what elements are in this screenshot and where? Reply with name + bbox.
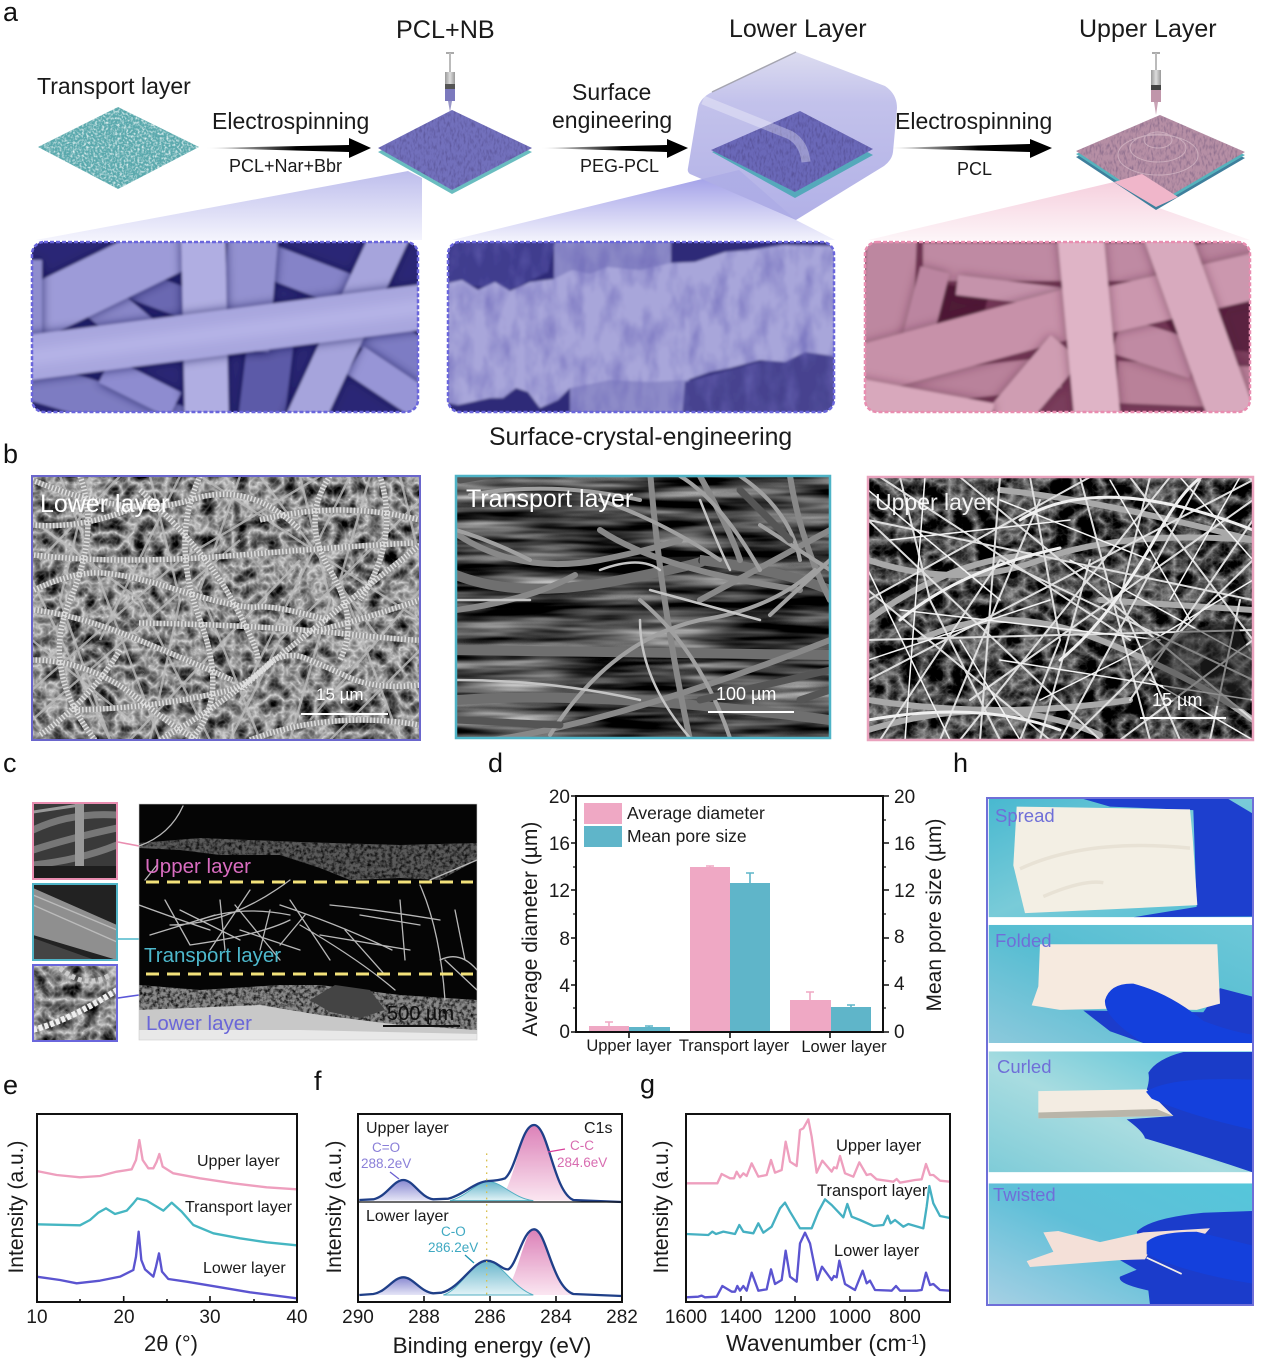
- axes frame: [358, 1114, 622, 1302]
- legend: [584, 803, 765, 847]
- annotation: C-C peak: [548, 1138, 607, 1170]
- x axis numbers: [665, 1307, 921, 1328]
- axes frame and ticks: [571, 796, 889, 1038]
- right axis numbers: [894, 787, 915, 1043]
- x axis numbers: 1200: [774, 1307, 816, 1328]
- scale bar: 15 µm: [1140, 690, 1226, 719]
- label c: c: [3, 748, 16, 778]
- y axis title: Intensity (a.u.): [5, 1140, 28, 1274]
- heading: lower layer: Lower Layer: [729, 15, 867, 43]
- label: twisted: Twisted: [993, 1184, 1056, 1205]
- x axis title: ): [919, 1330, 927, 1356]
- x axis numbers: 288: [408, 1307, 440, 1328]
- annotation: lower layer: Lower layer: [366, 1208, 449, 1225]
- axes frame: [686, 1114, 950, 1302]
- x axis title: Wavenumber (cm: [726, 1330, 907, 1356]
- category labels: Transport layer: [679, 1037, 790, 1055]
- inset: upper layer: [33, 803, 117, 879]
- annotation: upper layer and C1s: [366, 1120, 612, 1137]
- cross-section SEM image: [139, 804, 477, 1040]
- panel c: cross-section: [3, 748, 477, 1041]
- y axis title: Intensity (a.u.): [323, 1140, 346, 1274]
- annotation: C-O peak: 286.2eV: [428, 1240, 478, 1255]
- panel h: flexibility photos: [953, 748, 1253, 1305]
- panel d: bar chart: [488, 748, 946, 1056]
- arrow 2: [540, 139, 688, 158]
- axes frame: [37, 1114, 297, 1302]
- panel: lower fibre render: [30, 240, 420, 414]
- FTIR curves: [686, 1119, 950, 1297]
- right axis numbers: 8: [894, 927, 905, 948]
- scale bar: 15 µm: 15 µm: [1152, 690, 1202, 710]
- zoom beam to upper layer panel: [868, 182, 1250, 240]
- x axis numbers: 286: [474, 1307, 506, 1328]
- label d: d: [488, 748, 503, 778]
- label b: b: [3, 439, 18, 469]
- right axis title: Mean pore size (µm): [923, 818, 946, 1012]
- zoom beam to lower-left panel: [36, 171, 422, 240]
- label e: e: [3, 1070, 18, 1100]
- series labels: [817, 1137, 928, 1260]
- icon: upper layer sheet: [1076, 115, 1245, 210]
- zoom beam to surface engineering panel: [452, 170, 835, 240]
- left axis numbers: 16: [549, 834, 570, 855]
- left axis numbers: 8: [559, 929, 570, 950]
- legend: Mean pore size: [627, 826, 747, 846]
- x axis numbers: 800: [889, 1307, 921, 1328]
- panel b: SEM images: [3, 439, 1253, 745]
- icon: lower layer sheet inside crystal: [688, 52, 897, 220]
- x axis numbers: 284: [540, 1307, 572, 1328]
- inset: transport layer: [33, 884, 117, 960]
- right axis numbers: 12: [894, 881, 915, 902]
- bars: [589, 866, 871, 1032]
- left axis numbers: 12: [549, 881, 570, 902]
- annotation: C-O peak: [428, 1224, 478, 1263]
- photo: folded: [989, 925, 1253, 1043]
- heading: upper layer: Upper Layer: [1079, 15, 1217, 43]
- series labels: Transport layer: [817, 1182, 928, 1200]
- SEM: transport layer: [456, 470, 830, 745]
- x axis numbers: 40: [286, 1307, 308, 1328]
- x axis numbers: 282: [606, 1307, 638, 1328]
- label: folded: Folded: [995, 930, 1052, 951]
- series labels: [185, 1153, 293, 1277]
- dashed layer boundaries: [146, 882, 473, 974]
- scale bar: 100 µm: 100 µm: [716, 684, 776, 704]
- left axis numbers: 0: [559, 1022, 570, 1043]
- label: PEG-PCL: PEG-PCL: [580, 156, 659, 176]
- scale bar: 500 µm: 500 µm: [387, 1003, 454, 1025]
- annotation: upper layer and C1s: Upper layer: [366, 1120, 449, 1137]
- right axis numbers: 4: [894, 974, 905, 995]
- left axis numbers: 20: [549, 787, 570, 808]
- connector lines: [118, 842, 139, 998]
- series labels: Upper layer: [197, 1153, 280, 1170]
- label h: h: [953, 748, 968, 778]
- label: upper layer: Upper layer: [875, 489, 994, 515]
- legend: Average diameter: [627, 803, 765, 823]
- right axis numbers: 16: [894, 834, 915, 855]
- XRD curves: [37, 1140, 297, 1298]
- left axis numbers: [549, 787, 570, 1043]
- x axis numbers: 1600: [665, 1307, 707, 1328]
- label: lower layer: Lower layer: [146, 1012, 252, 1035]
- annotation: C-C peak: 284.6eV: [557, 1155, 607, 1170]
- panel e: XRD chart: [3, 1070, 308, 1356]
- heading: transport layer: Transport layer: [37, 73, 191, 99]
- panel f: XPS chart: [314, 1066, 638, 1358]
- scale bar: 15 µm: 15 µm: [316, 685, 364, 704]
- series labels: Lower layer: [834, 1242, 920, 1260]
- label: PCL+Nar+Bbr: PCL+Nar+Bbr: [229, 156, 342, 176]
- label: electrospinning 2: Electrospinning: [895, 108, 1052, 134]
- arrow 1: [205, 138, 371, 158]
- icon: PCL+NB sheet: [378, 110, 532, 194]
- label: surface engineering: engineering: [552, 107, 672, 133]
- panel: crystal-engineered fibre render: [444, 238, 840, 418]
- x axis numbers: 1400: [720, 1307, 762, 1328]
- x axis numbers: 1000: [829, 1307, 871, 1328]
- x axis numbers: 30: [199, 1307, 221, 1328]
- label: lower layer: Lower layer: [40, 490, 169, 518]
- category labels: Lower layer: [801, 1038, 887, 1056]
- x axis numbers: 10: [26, 1307, 48, 1328]
- x axis title: Binding energy (eV): [393, 1333, 591, 1358]
- frame: [987, 798, 1253, 1305]
- left axis numbers: 4: [559, 976, 570, 997]
- icon: syringe 2: [1151, 52, 1161, 115]
- XPS spectra: [359, 1125, 622, 1298]
- annotation: C=O peak: [361, 1140, 411, 1179]
- right axis numbers: 20: [894, 787, 915, 808]
- label: electrospinning 1: Electrospinning: [212, 108, 369, 134]
- x axis numbers: [26, 1307, 308, 1328]
- annotation: C-O peak: C-O: [441, 1224, 466, 1239]
- y axis title: Intensity (a.u.): [650, 1140, 673, 1274]
- series labels: Transport layer: [185, 1199, 293, 1216]
- panel g: FTIR chart: [640, 1069, 950, 1356]
- annotation: upper layer and C1s: C1s: [584, 1120, 612, 1137]
- series labels: Upper layer: [836, 1137, 922, 1155]
- photo strip: [989, 798, 1253, 1305]
- label: PCL: PCL: [957, 159, 992, 179]
- SEM: lower layer: [32, 476, 420, 740]
- arrow 3: [888, 139, 1052, 158]
- photo: curled: [989, 1051, 1253, 1172]
- x axis numbers: [342, 1307, 638, 1328]
- left axis title: Average diameter (µm): [519, 822, 542, 1036]
- annotation: C=O peak: C=O: [372, 1140, 400, 1155]
- category labels: Upper layer: [586, 1037, 672, 1055]
- x axis title: -1: [907, 1331, 919, 1347]
- label: transport layer: Transport layer: [466, 485, 633, 513]
- SEM: upper layer: [868, 468, 1253, 740]
- label: surface engineering: [552, 79, 672, 133]
- label: upper layer: Upper layer: [145, 855, 251, 878]
- photo: spread: [989, 798, 1253, 917]
- label: transport layer: Transport layer: [144, 944, 281, 967]
- icon: syringe 1: [445, 52, 455, 112]
- label g: g: [640, 1069, 655, 1099]
- photo: twisted: [989, 1183, 1253, 1305]
- scale bar: 100 µm: [708, 684, 794, 713]
- x axis numbers: 20: [113, 1307, 135, 1328]
- label: surface engineering: Surface: [572, 79, 651, 105]
- annotation: C=O peak: 288.2eV: [361, 1156, 411, 1171]
- series labels: Lower layer: [203, 1260, 286, 1277]
- panel a: fabrication schematic: [3, 0, 1260, 451]
- annotation: C-C peak: C-C: [570, 1138, 594, 1153]
- caption: Surface-crystal-engineering: [489, 424, 792, 451]
- category labels: [586, 1037, 887, 1056]
- right axis numbers: 0: [894, 1022, 905, 1043]
- scale bar: 15 µm: [301, 685, 388, 715]
- inset: lower layer: [33, 965, 117, 1041]
- label: curled: Curled: [997, 1056, 1052, 1077]
- panel: upper fibre render: [864, 240, 1252, 414]
- label f: f: [314, 1066, 322, 1096]
- heading: PCL+NB: PCL+NB: [396, 16, 495, 44]
- x axis title: 2θ (°): [144, 1331, 198, 1356]
- label: spread: Spread: [995, 805, 1055, 826]
- icon: transport layer sheet: [38, 107, 199, 189]
- x axis numbers: 290: [342, 1307, 374, 1328]
